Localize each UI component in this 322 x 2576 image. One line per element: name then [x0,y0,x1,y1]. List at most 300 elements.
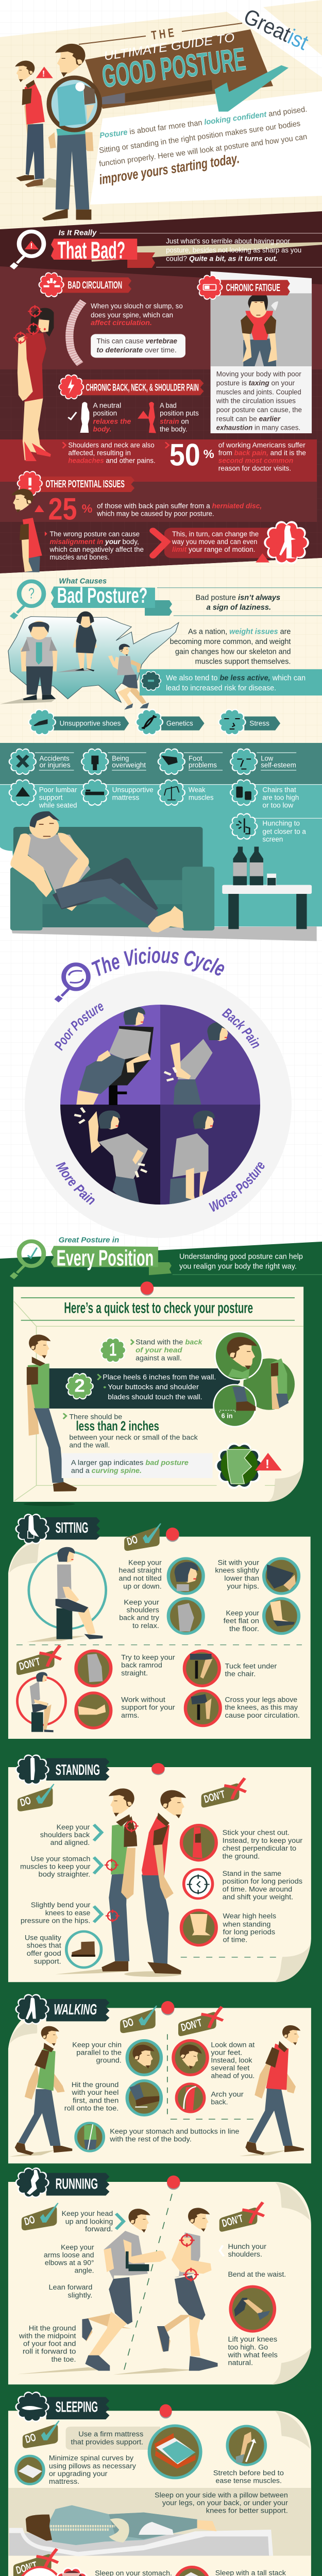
band: less active: lead to increased risk for disease. [166,684,276,692]
bad position comparison [138,402,199,433]
causes: lower rows: are too high [262,794,299,802]
step 2: 2 [74,1376,85,1396]
icon and text: pillow: using pillows as necessary [49,2462,136,2470]
figure: good walking man [9,2026,72,2157]
band: side sleeping: your legs, on your back, or under your [162,2499,288,2507]
text: misalignment: muscles and bones. [49,553,109,562]
causes: lower rows: Poor lumbar [39,786,77,794]
text: walking don't: Arch your [211,2091,244,2098]
text: running do upper: up and looking [65,2218,113,2226]
background disc [25,971,292,1238]
text: standing don't: Wear high heels [223,1912,276,1920]
text: standing don't: of time. Move around [223,1886,292,1893]
stat: 25 percent [48,492,262,527]
cycle label: worse posture: Worse Posture [209,1162,265,1212]
badge and ribbon: sleeping: SLEEPING [56,2399,98,2415]
tag: do [120,2006,157,2033]
callout: range of motion: limit your range of motion. [172,546,255,554]
text: weight issues: muscles support themselves. [195,657,291,666]
text: misalignment: which can negatively affect the [49,546,144,554]
text: walking do: with the rest of the body. [109,2136,192,2143]
text: sitting do: Keep your [226,1609,259,1617]
text: bad circulation: When you slouch or slump, so [91,302,183,310]
text: running don't upper [228,2243,286,2279]
illustration: stomach sleeper [19,2567,90,2576]
text: standing do: offer good [27,1950,61,1958]
text: standing do: Use quality [25,1934,61,1942]
figure: overweight man [0,621,58,704]
badge and ribbon: running [15,2167,109,2198]
badge and ribbon: walking: WALKING [54,2002,97,2018]
section: bad circulation and pain [13,272,312,496]
tag: do: DO [121,2015,135,2030]
text: sitting don't: back ramrod [121,1662,162,1669]
band: side sleeping: knees for better support. [206,2507,288,2515]
text: running do upper: Keep your head [62,2210,113,2218]
intro call to action: improve yours starting today. [98,150,241,188]
intro copy line 3: function properly. Here we will look at posture and how you can [98,132,308,168]
step 2: Your buttocks and shoulder [108,1383,199,1391]
step 2: Place heels 6 inches from the wall. [103,1374,216,1381]
text: bad circulation: does your spine, which can [91,311,173,319]
text: walking don't: your feet. [211,2049,242,2057]
ribbon: every position: Every Position [57,1246,154,1271]
callout: larger gap: and a curving spine. [71,1467,142,1475]
callout: larger gap: A larger gap indicates bad posture [71,1459,189,1467]
text: misalignment: The wrong posture can cause [49,530,140,538]
kicker: great posture in: Great Posture in [59,1236,119,1244]
stat: 25 percent: 25 [48,492,77,527]
floor [11,926,317,941]
text: standing don't: when standing [223,1921,270,1928]
causes: lower rows: muscles [189,794,214,802]
callout: vertebrae [91,334,185,358]
tag: do: DO [23,2431,38,2445]
icon and text: pillow [16,2454,136,2486]
stat: 50 percent [165,438,306,472]
illustration: side table with bottles [222,846,312,929]
text: bad circulation [91,302,183,327]
cause: genetics: Genetics [166,719,193,727]
band: side sleeping [8,2488,311,2556]
callout: vertebrae: This can cause vertebrae [96,337,177,345]
pin [141,1281,154,1296]
detail circles: don't [76,1651,221,1728]
detail: knees too high: too high. Go [228,2343,268,2351]
rules: cause rows [35,752,296,754]
text: sitting don't: the knees, as this may [225,1704,298,1711]
figure: runner [108,644,149,710]
illustration: spine [70,301,83,364]
badge and ribbon: other potential issues [17,471,134,496]
title: ultimate guide to: ULTIMATE GUIDE TO [103,30,235,63]
text: walking do: ground. [96,2057,122,2064]
dashed lean line [124,2194,172,2371]
panel: walking paper [8,2008,311,2163]
text: running do upper [44,2210,113,2275]
figure: good standing man [101,1788,139,1972]
tag: don't [219,2202,264,2232]
panel: sleeping paper [8,2411,311,2576]
section: other issues and causes [0,489,322,753]
text: sitting don't: arms. [121,1711,139,1720]
shadows [56,1969,182,1977]
badge and ribbon: running: RUNNING [56,2176,98,2192]
causes: lower rows: Chairs that [262,786,296,794]
band: less active: We also tend to be less active, which can [166,674,306,682]
step 1: 1 [109,1340,116,1360]
text: walking don't [211,2041,255,2106]
pin [151,1763,165,1775]
neutral position comparison: A neutral [93,402,121,410]
figure: good runner [82,2209,166,2371]
text: running do lower: with the midpoint [19,2332,76,2340]
text: less than 2 inches: and the wall. [69,1442,110,1449]
cause: genetics [135,709,205,735]
icon: check magnifier [12,1241,44,1278]
text: shoulders and neck: affected, resulting in [68,449,131,457]
section: teal causes and couch [0,749,322,941]
section: sleeping [8,2392,311,2576]
stat: 50 percent: of working Americans suffer [218,442,306,449]
logo: Greatist: Greatist [240,4,312,55]
causes: lower rows: Unsupportive [112,786,154,794]
tag: do [124,1523,161,1551]
stat: 50 percent: second most common [218,456,293,465]
text: standing don't: for long periods [223,1928,275,1936]
text: chronic fatigue [216,370,302,432]
text: less than 2 inches [63,1413,198,1449]
causes: upper row: Being [112,755,129,762]
intro paragraph: could? Quite a bit, as it turns out. [166,255,278,263]
text: standing do: support. [34,1958,61,1965]
figure: overweight woman [57,612,97,672]
stat: 50 percent: % [204,448,214,461]
text: misalignment: misalignment in your body, [49,538,139,546]
causes: upper row [0,749,322,818]
text: not always laziness [157,588,322,616]
icon: curving spine with warning: ! [265,1457,269,1471]
step 1: Stand with the back [135,1338,203,1346]
text: walking do: first, and then [73,2097,118,2105]
text: standing do: Slightly bend your [31,1901,90,1909]
figure: incorrect sitting [17,1672,66,1732]
text: sitting do: back and try [119,1614,159,1622]
causes: upper row: Foot [189,755,202,762]
chevrons [94,1825,101,1922]
title banner [85,29,273,109]
figure: bad posture man [15,61,75,188]
dashed divider: walking [167,2034,253,2119]
panel: standing paper [8,1767,311,1982]
bad position comparison: strain on [160,418,189,426]
text: sitting do [118,1559,259,1633]
tag: do [23,2420,60,2448]
bad position comparison: position puts [160,410,199,417]
heading: what causes bad posture: Bad Posture? [57,583,147,607]
badge and ribbon: other potential issues: OTHER POTENTIAL ISSUES [45,478,125,489]
heading ribbon: That Bad [51,236,155,268]
badge: battery [197,275,223,300]
pin [167,2176,180,2190]
heading icon: magnifier with warning: ! [30,242,32,250]
tag: don't: DON’T [14,2559,40,2576]
illustrations: vicious cycle women [74,1007,229,1206]
section: sitting [8,1514,311,1739]
woman: worse posture [170,1110,215,1206]
text: sitting do: the floor. [229,1625,259,1633]
text: running do lower: of your foot and [23,2340,76,2348]
paper [13,1287,303,1506]
woman: back pain [164,1022,229,1105]
text: running do upper: arms loose and [44,2251,94,2259]
chevrons: running [116,2214,224,2256]
panel: running paper [8,2182,311,2384]
text: walking don't: Look down at [211,2041,255,2049]
text: chronic fatigue: exhaustion in many cases. [216,424,300,432]
text: standing don't: Stick your chest out. [223,1829,290,1837]
bad position comparison: A bad [160,402,177,410]
text: less than 2 inches: There should be [69,1413,122,1421]
text: sitting do: Keep your [128,1559,162,1567]
pin [161,2001,174,2015]
text: sitting do: up or down. [123,1583,162,1590]
text: misalignment [45,530,144,562]
text: standing do: knees to ease [45,1909,90,1917]
causes: lower rows: Hunching to [262,820,300,827]
tag: do: DO [125,1533,140,1548]
causes: lower rows: screen [262,836,283,843]
text: weight issues: becoming more common, and weight [170,637,291,646]
callout: firm mattress: that provides support. [71,2438,143,2446]
heading: what causes bad posture: ? [28,585,35,602]
text: sitting don't: support for your [121,1704,175,1711]
tag: don't [201,1778,246,1807]
text: walking don't: several feet [211,2064,250,2072]
cause: stress: Stress [249,719,269,727]
step 2: blades should touch the wall. [108,1393,202,1401]
section: walking and running [8,1994,311,2384]
callout: range of motion: way you move and can even [172,538,257,546]
text: running do upper: Keep your [61,2244,94,2251]
white intro band [90,91,322,205]
stat: 50 percent: from back pain, and it is the [218,449,306,457]
callout: firm mattress [66,2427,160,2450]
figure: slouching woman in red dress [13,305,54,461]
heading: quick test [21,1298,295,1320]
cycle label: back pain: Back Pain [222,1008,260,1049]
magnifier handle [102,80,213,105]
tag: do: DO [22,2213,37,2228]
text: standing don't: Instead, try to keep your [223,1837,302,1845]
icon: stretching arm: Stretch before bed to [213,2469,284,2477]
panel: sitting paper [8,1537,311,1739]
text: walking don't: back. [211,2098,228,2106]
text: running do upper: forward. [85,2225,113,2233]
causes: upper row: self-esteem [261,761,296,769]
heading icon: magnifier with warning [12,231,44,268]
figure: man against wall [27,1334,77,1492]
icon: stretching arm [213,2426,284,2485]
text: weight issues: As a nation, weight issues are [188,628,291,636]
tag: don't: DON’T [220,2212,245,2229]
pin [166,1528,179,1542]
stat: 50 percent: 50 [170,438,200,472]
text: standing do: shoulders back [40,1831,90,1839]
causes: upper row: Low [261,755,274,762]
detail: knees too high: natural. [228,2359,253,2367]
heading ribbon: That Bad: That Bad? [58,236,125,264]
text: sitting don't: the chair. [225,1670,256,1678]
intro paragraph: Just what’s so terrible about having poor [166,238,290,245]
icon: supportive boot [66,1931,101,1968]
checkmark [215,65,289,112]
tag: don't: DON’T [179,2016,205,2033]
causes: lower rows: while seated [39,802,77,809]
callout: firm mattress: Use a firm mattress [78,2430,143,2438]
text: sitting do: shoulders [127,1606,159,1614]
text: running do lower: slightly. [68,2291,92,2299]
woman: poor posture in chair [76,1007,154,1105]
badge and ribbon: standing [15,1754,109,1785]
text: walking don't: Instead, look [211,2057,252,2064]
text: sitting don't: straight. [121,1669,148,1677]
text: sitting do: head straight [118,1567,162,1574]
step 2 [65,1373,216,1401]
icon and text: pillow: or upgrading your [49,2470,107,2478]
figure: bad standing man [142,1790,186,1974]
crop scale group: header figures and That Bad heading [12,44,322,268]
text: walking do [64,2041,239,2143]
text: chronic fatigue: posture is taxing on your [216,379,295,387]
detail: knees too high [227,2286,278,2367]
text: realign: you realign your body the right way. [179,1262,297,1270]
text: chronic fatigue: muscles and joints. Coupled [216,388,301,396]
heading icon: cycle magnifier [57,964,88,1001]
text: running don't upper: Hunch your [228,2243,266,2251]
text: sitting do: Sit with your [218,1559,259,1567]
shadow below white band [90,242,322,262]
text: walking do: roll onto the toe. [64,2105,118,2112]
text: weight issues: gain changes how our skeleton and [175,648,291,656]
text: standing do: Use your stomach [31,1855,90,1863]
text: chronic fatigue: result can be earlier [216,415,281,423]
text: realign [173,1252,322,1275]
badge and ribbon: sleeping [15,2392,109,2422]
causes: lower rows: mattress [112,794,139,802]
text: chronic fatigue: poor posture can cause, the [216,406,302,414]
text: sitting don't: cause poor circulation. [225,1711,300,1720]
causes: lower rows: Weak [189,786,206,794]
neutral position comparison [68,402,131,433]
text: weight issues [170,628,291,666]
causes: lower rows: get closer to a [262,828,306,836]
badge and ribbon: bad circulation: BAD CIRCULATION [68,279,122,291]
text: running do upper: elbows at a 90° [45,2259,94,2267]
badge and ribbon: sitting [15,1514,100,1544]
heading: the vicious cycle: The Vicious Cycle [91,947,225,976]
text: standing do [20,1823,90,1965]
icon: curving spine with warning [215,1443,282,1489]
tag: do [22,2203,59,2230]
illustration: man slouching on couch [10,811,214,933]
text: standing do: body straighter. [39,1871,90,1878]
shadows [18,2367,195,2375]
text: standing don't: chest perpendicular to [223,1844,296,1853]
callout: vertebrae: to deteriorate over time. [96,346,177,354]
heading: what causes bad posture: What Causes [59,577,107,585]
band: less active [140,669,322,696]
detail: knees too high: Lift your knees [228,2335,277,2344]
text: standing do: pressure on the hips. [21,1917,90,1925]
heading: the vicious cycle [91,947,225,976]
step 1: of your head [135,1346,182,1354]
callout: larger gap [62,1453,213,1478]
badge and ribbon: walking [15,1994,109,2025]
text: sitting do: your hips. [227,1583,259,1590]
text: walking do: Hit the ground [72,2081,118,2089]
tag: don't [16,1646,61,1675]
text: walking do: with your heel [72,2089,118,2097]
intro copy line 2: Sitting or standing in the right position makes sure our bodies [98,119,301,155]
tag: do: DO [18,1794,32,1808]
heading: great posture in every position [12,1236,322,1278]
badge and ribbon: chronic back pain [58,375,204,399]
tag: do [18,1784,55,1811]
text: standing do: Keep your [57,1823,90,1832]
heading kicker: Is It Really [59,229,97,237]
stat: 25 percent: % [82,502,92,515]
text: standing don't: the ground. [223,1853,260,1860]
tag: don't: DON’T [202,1788,227,1805]
text: standing do: shoes that [27,1942,61,1950]
text: not always laziness: Bad posture isn’t always [195,594,280,602]
text: chronic fatigue: Moving your body with poor [216,370,301,378]
text: standing do: muscles to keep your [20,1863,90,1871]
text: standing don't [223,1829,302,1944]
text: running don't upper: Bend at the waist. [228,2270,286,2279]
intro paragraph [156,238,322,267]
figure: good posture man with magnifier [42,44,102,221]
neutral position comparison: position [93,410,117,417]
text: shoulders and neck: Shoulders and neck are also [68,442,155,449]
text: sitting don't: Try to keep your [121,1654,175,1662]
stat: 50 percent: reason for doctor visits. [218,465,291,472]
text: shoulders and neck: headaches and other pains. [68,456,156,465]
icon and text: tall pillows [175,2567,286,2576]
causes: lower rows: or too low [262,802,294,809]
ribbon: every position [51,1246,172,1275]
text: chronic fatigue: with the circulation issues [216,397,296,405]
text: running do lower [19,2283,92,2364]
badge and ribbon: bad circulation [39,272,131,297]
text: walking don't: ahead of you. [211,2072,255,2080]
tag: don't: DON’T [17,1655,43,1672]
text: running do upper: angle. [75,2267,94,2275]
quadrants [60,1005,260,1205]
causes: upper row: overweight [112,761,146,769]
text: standing don't: and shift your weight. [223,1893,293,1901]
text: walking do: Keep your chin [72,2041,122,2049]
text: shoulders and neck [63,442,156,465]
causes: upper row: Accidents [40,755,70,762]
causes: lower rows: support [39,794,63,802]
detail circles: head, back, heels: 6 in [222,1412,233,1419]
badge and ribbon: sitting: SITTING [56,1520,88,1536]
tag: don't [178,2007,223,2036]
cause: stress [218,709,280,735]
cause: unsupportive shoes: Unsupportive shoes [60,719,121,727]
